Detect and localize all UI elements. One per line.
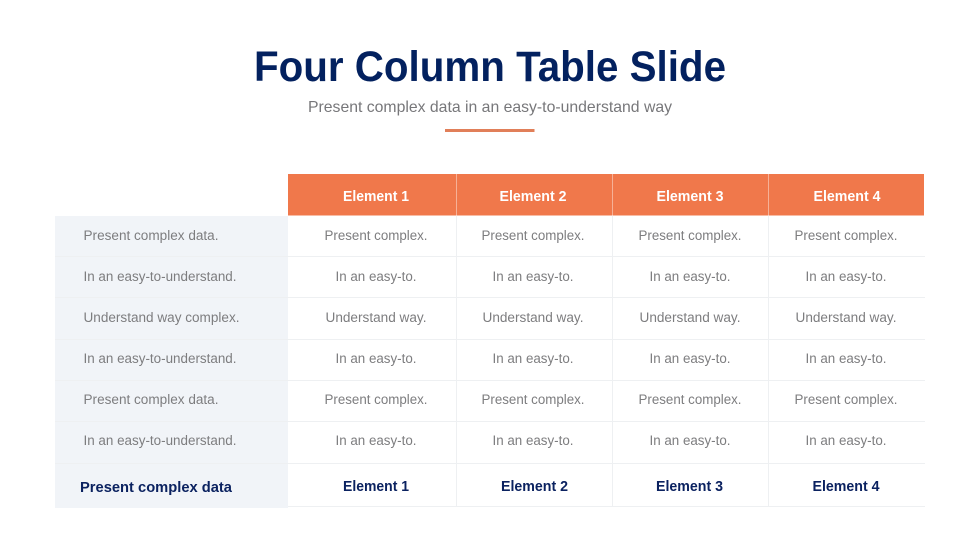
row 2: In an easy-to. <box>336 269 416 284</box>
row 2: In an easy-to. <box>650 269 730 284</box>
row 4 <box>84 351 886 366</box>
header row: Element 3 <box>656 189 724 205</box>
row 4: In an easy-to. <box>492 351 574 366</box>
row 5: Present complex. <box>794 392 898 407</box>
row 1: Present complex. <box>638 228 742 243</box>
summary row <box>80 479 880 496</box>
left label column background <box>55 216 288 508</box>
row 5 <box>84 392 898 407</box>
row 1: Present complex. <box>324 228 428 243</box>
row 4: In an easy-to. <box>336 351 416 366</box>
row 4: In an easy-to. <box>806 351 886 366</box>
grid lines <box>55 216 925 507</box>
header row: Element 2 <box>500 189 566 205</box>
header row: Element 1 <box>343 189 409 205</box>
row 5: Present complex data. <box>84 392 218 407</box>
row 5: Present complex. <box>324 392 428 407</box>
row 1 <box>84 228 898 243</box>
row 5: Present complex. <box>638 392 742 407</box>
row 3: Understand way. <box>482 310 584 325</box>
header row: Element 4 <box>814 189 880 205</box>
row 3 <box>84 310 896 325</box>
row 4: In an easy-to. <box>650 351 730 366</box>
row 1: Present complex. <box>794 228 898 243</box>
row 6 <box>84 433 886 448</box>
row 5: Present complex. <box>482 392 584 407</box>
summary row: Element 3 <box>656 479 723 495</box>
summary row: Element 1 <box>343 479 409 495</box>
row 2 <box>84 269 886 284</box>
row 2: In an easy-to. <box>806 269 886 284</box>
row 6: In an easy-to. <box>492 433 574 448</box>
summary row: Element 4 <box>812 479 880 495</box>
title: Four Column Table Slide <box>254 43 726 91</box>
row 6: In an easy-to. <box>650 433 730 448</box>
table <box>55 174 925 508</box>
row 2: In an easy-to-understand. <box>84 269 236 284</box>
row 1: Present complex. <box>482 228 584 243</box>
row 3: Understand way. <box>796 310 896 325</box>
summary row: Present complex data <box>80 480 233 496</box>
row 2: In an easy-to. <box>492 269 574 284</box>
row 3: Understand way complex. <box>84 310 240 325</box>
summary row: Element 2 <box>501 479 568 495</box>
row 3: Understand way. <box>326 310 426 325</box>
row 6: In an easy-to. <box>336 433 416 448</box>
row 6: In an easy-to. <box>806 433 886 448</box>
row 6: In an easy-to-understand. <box>84 433 236 448</box>
accent rule <box>445 129 534 132</box>
header row <box>288 174 924 216</box>
subtitle: Present complex data in an easy-to-understand way <box>308 99 672 116</box>
row 1: Present complex data. <box>84 228 218 243</box>
row 4: In an easy-to-understand. <box>84 351 236 366</box>
row 3: Understand way. <box>640 310 740 325</box>
